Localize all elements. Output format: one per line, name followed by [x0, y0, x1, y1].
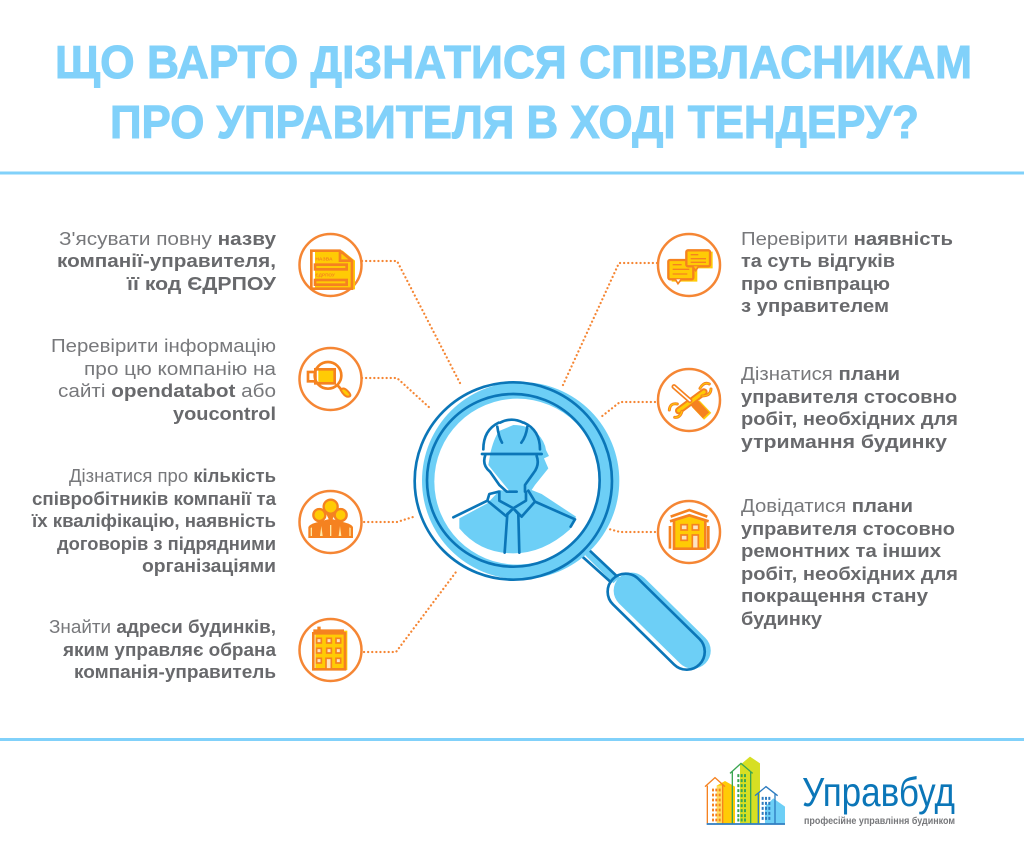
text block: addresses: Знайти адреси будинків,: [49, 617, 276, 637]
text block: repair plans: будинку: [741, 609, 822, 629]
icon: document: НАЗВА: [315, 257, 333, 263]
text block: repair plans: управителя стосовно: [741, 519, 955, 539]
text block: check company online: сайті opendatabot або: [58, 381, 276, 401]
icon: document: ЄДРПОУ: [315, 272, 335, 277]
text block: repair plans: покращення стану: [741, 586, 928, 606]
magnifying glass: [415, 382, 718, 677]
text block: staff: Дізнатися про кількість: [69, 466, 276, 486]
icon: house: [658, 501, 720, 563]
connector lines: [360, 261, 657, 652]
magnifier lens: [415, 382, 619, 580]
text block: reviews: та суть відгуків: [741, 251, 895, 271]
title: [55, 36, 972, 148]
text block: company name: її код ЄДРПОУ: [126, 274, 277, 294]
logo buildings: [705, 757, 785, 824]
text block: company name: [57, 229, 277, 294]
text block: maintenance plans: робіт, необхідних для: [741, 409, 958, 429]
icon: search company: [300, 348, 362, 410]
text block: staff: співробітників компанії та: [32, 489, 277, 509]
text block: staff: договорів з підрядними: [57, 534, 276, 554]
text block: maintenance plans: Дізнатися плани: [741, 364, 900, 384]
text block: maintenance plans: управителя стосовно: [741, 387, 957, 407]
icon: speech bubbles: [658, 234, 720, 296]
text block: addresses: [49, 617, 277, 682]
text block: maintenance plans: [741, 364, 958, 452]
text block: company name: З'ясувати повну назву: [59, 229, 276, 249]
text block: reviews: [741, 229, 953, 316]
logo: Upravbud: [705, 757, 955, 827]
text block: maintenance plans: утримання будинку: [741, 432, 947, 452]
text block: check company online: [51, 336, 277, 424]
text block: staff: їх кваліфікацію, наявність: [31, 511, 276, 531]
text block: staff: організаціями: [142, 556, 276, 576]
text block: repair plans: Довідатися плани: [741, 496, 913, 516]
icon: staff group: [300, 491, 362, 553]
logo name: Управбуд: [802, 769, 955, 815]
text block: check company online: youcontrol: [173, 404, 276, 424]
text block: addresses: яким управляє обрана: [62, 640, 277, 660]
icon: document: [300, 234, 362, 296]
text block: repair plans: [741, 496, 958, 629]
magnifier handle: [582, 548, 718, 677]
icon: tools: [658, 369, 720, 431]
text block: staff: [31, 466, 277, 576]
text block: reviews: про співпрацю: [741, 274, 890, 294]
text block: reviews: Перевірити наявність: [741, 229, 953, 249]
title: ПРО УПРАВИТЕЛЯ В ХОДІ ТЕНДЕРУ?: [110, 96, 919, 148]
text block: repair plans: робіт, необхідних для: [741, 564, 958, 584]
text block: reviews: з управителем: [741, 296, 889, 316]
icon: apartment building: [300, 619, 362, 681]
text block: check company online: Перевірити інформацію: [51, 336, 276, 356]
title: ЩО ВАРТО ДІЗНАТИСЯ СПІВВЛАСНИКАМ: [55, 36, 972, 88]
text block: company name: компанії-управителя,: [57, 251, 276, 271]
text block: repair plans: ремонтних та інших: [741, 541, 941, 561]
logo tagline: професійне управління будинком: [804, 815, 955, 827]
text block: check company online: про цю компанію на: [84, 359, 277, 379]
worker portrait: [453, 420, 576, 553]
text block: addresses: компанія-управитель: [74, 662, 276, 682]
